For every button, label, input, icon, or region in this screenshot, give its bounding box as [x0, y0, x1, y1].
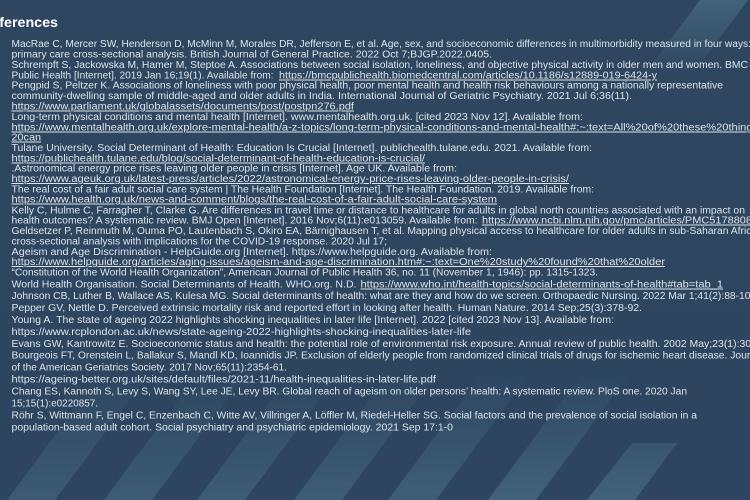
reference: Chang: Chang ES, Kannoth S, Levy S, Wang SY, Lee JE, Levy BR. Global reach of ageism on older persons’ health: A systematic review. PloS one. 2020 Jan [12, 386, 687, 398]
reference: MacRae [12, 39, 750, 60]
reference: Kelly: https://www.ncbi.nlm.nih.gov/pmc/articles/PMC5178808 [482, 216, 750, 226]
reference: Schrempft [12, 60, 748, 82]
reference: Kelly: Kelly C, Hulme C, Farragher T, Clarke G. Are differences in travel time or distance to healthcare for adults in global north countries associated with an impact on [12, 206, 745, 216]
reference: Bourgeois [12, 350, 750, 374]
reference: MacRae: primary care cross-sectional analysis. British Journal of General Practice. 2022 Oct 7;BJGP.2022.0405. [12, 50, 492, 60]
reference: Age UK [12, 164, 569, 185]
reference: Health Foundation [12, 184, 594, 206]
reference: Pengpid: community-dwelling sample of middle-aged and older adults in India. International Journal of Geriatric Psychiatry. 2021 Jul 6;36(11). [12, 91, 632, 102]
reference: WHO social determinants: https://www.who.int/health-topics/social-determinants-of-health#tab=tab_1 [360, 280, 723, 290]
reference: Schrempft: https://bmcpublichealth.biomedcentral.com/articles/10.1186/s12889-019-6424-y [279, 70, 657, 82]
reference: Schrempft: Public Health [Internet]. 2019 Jan 16;19(1). Available from: [12, 70, 274, 82]
reference: Röhr: population-based adult cohort. Social psychiatry and psychiatric epidemiology. 2021 Sep 17:1-0 [12, 422, 453, 434]
reference: Age UK: .Astronomical energy price rises leaving older people in crisis [Internet]. Age UK. Available from: [12, 164, 457, 174]
reference: Kelly: health outcomes? A systematic review. BMJ Open [Internet]. 2016 Nov;6(11):e013059. Available from: [12, 216, 478, 226]
reference: Tulane: Tulane University. Social Determinant of Health: Education Is Crucial [Internet]. publichealth.tulane.edu. 2021. Available from: [12, 143, 592, 154]
reference: Röhr [12, 410, 697, 434]
reference: WHO social determinants [12, 280, 723, 290]
reference: Geldsetzer: Geldsetzer P, Reinmuth M, Ouma PO, Lautenbach S, Okiro EA, Bärnighausen T, et al. Mapping physical access to healthcare for older adults in sub-Saharan Africa: [12, 226, 750, 237]
reference: Health Foundation: https://www.health.org.uk/news-and-comment/blogs/the-real-cost-of-a-fair-adult-social-care-system [12, 194, 497, 206]
reference: Johnson: Johnson CB, Luther B, Wallace AS, Kulesa MG. Social determinants of health: what are they and how do we screen. Orthopaedic Nursing. 2022 Mar 1;41(2):88-100. [12, 291, 750, 302]
reference: Kelly [12, 206, 750, 226]
reference: Schrempft: Schrempft S, Jackowska M, Hamer M, Steptoe A. Associations between social isolation, loneliness, and objective physical activity in older men and women. BMC [12, 60, 748, 71]
reference: WHO constitution: “Constitution of the World Health Organization”, American Journal of Public Health 36, no. 11 (November 1, 1946): pp. 1315-1323. [12, 268, 598, 278]
reference: Ageing Better: https://ageing-better.org.uk/sites/default/files/2021-11/health-inequalities-in-later-life.pdf [12, 374, 436, 386]
reference: Age UK: https://www.ageuk.org.uk/latest-press/articles/2022/astronomical-energy-price-rises-leaving-older-people-in-crisis/ [12, 174, 569, 185]
reference: Geldsetzer: cross-sectional analysis with implications for the COVID-19 response. 2020 Jul 17; [12, 236, 387, 248]
reference: Pepper: Pepper GV, Nettle D. Perceived extrinsic mortality risk and reported effort in looking after health. Human Nature. 2014 Sep;25(3):378-92. [12, 303, 642, 314]
reference: Health Foundation: The real cost of a fair adult social care system | The Health Foundation [Internet]. The Health Foundation. 2019. Available from: [12, 184, 594, 196]
reference: MacRae: MacRae C, Mercer SW, Henderson D, McMinn M, Morales DR, Jefferson E, et al. Age, sex, and socioeconomic differences in multimorbidity measured in four ways: [12, 39, 750, 50]
reference: Young: Young A. The state of ageing 2022 highlights shocking inequalities in later life [Internet]. 2022 [cited 2023 Nov 13]. Available from: [12, 315, 614, 326]
reference: Evans: Evans GW, Kantrowitz E. Socioeconomic status and health: the potential role of environmental risk exposure. Annual review of public health. 2002 May;23(1):303-31. [12, 339, 750, 350]
reference: Young: https://www.rcplondon.ac.uk/news/state-ageing-2022-highlights-shocking-inequalities-later-life [12, 327, 471, 338]
reference: Pengpid: Pengpid S, Peltzer K. Associations of loneliness with poor physical health, poor mental health and health risk behaviours among a nationally representative [12, 80, 723, 92]
reference: Chang [12, 386, 687, 410]
reference: Tulane [12, 143, 592, 164]
reference: mental health foundation [12, 112, 750, 144]
reference: mental health foundation: 20can [12, 132, 41, 144]
reference: Pengpid [12, 80, 723, 102]
reference list [12, 39, 750, 434]
reference: Geldsetzer [12, 226, 750, 248]
reference: mental health foundation: https://www.mentalhealth.org.uk/explore-mental-health/a-z-topics/long-term-physical-conditions-and-mental-health#:~:text=All%20of%20these%20thing [12, 122, 750, 134]
reference: HelpGuide [12, 247, 666, 268]
reference: Chang: 15;15(1):e0220857. [12, 398, 98, 410]
reference: mental health foundation: Long-term physical conditions and mental health [Internet]. www.mentalhealth.org.uk. [cited 2023 Nov 12]. Available from: [12, 112, 583, 123]
reference: parliament link: https://www.parliament.uk/globalassets/documents/post/postpn276.pdf [12, 102, 354, 112]
reference: HelpGuide: Ageism and Age Discrimination - HelpGuide.org [Internet]. https://www.helpguide.org. Available from: [12, 247, 492, 258]
reference: Bourgeois: Bourgeois FT, Orenstein L, Ballakur S, Mandl KD, Ioannidis JP. Exclusion of elderly people from randomized clinical trials of drugs for ischemic heart disease. Journal [12, 350, 750, 362]
reference: HelpGuide: https://www.helpguide.org/articles/aging-issues/ageism-and-age-discrimination.htm#:~:text=One%20study%20found%20that%20older [12, 257, 666, 268]
reference: Bourgeois: of the American Geriatrics Society. 2017 Nov;65(11):2354-61. [12, 362, 287, 374]
reference: Young [12, 315, 614, 338]
reference: Tulane: https://publichealth.tulane.edu/blog/social-determinant-of-health-education-is-crucial/ [12, 154, 425, 164]
reference: Röhr: Röhr S, Wittmann F, Engel C, Enzenbach C, Witte AV, Villringer A, Löffler M, Riedel-Heller SG. Social factors and the prevalence of social isolation in a [12, 410, 697, 422]
reference: WHO social determinants: World Health Organisation. Social Determinants of Health. WHO.org. N.D. [12, 280, 356, 290]
